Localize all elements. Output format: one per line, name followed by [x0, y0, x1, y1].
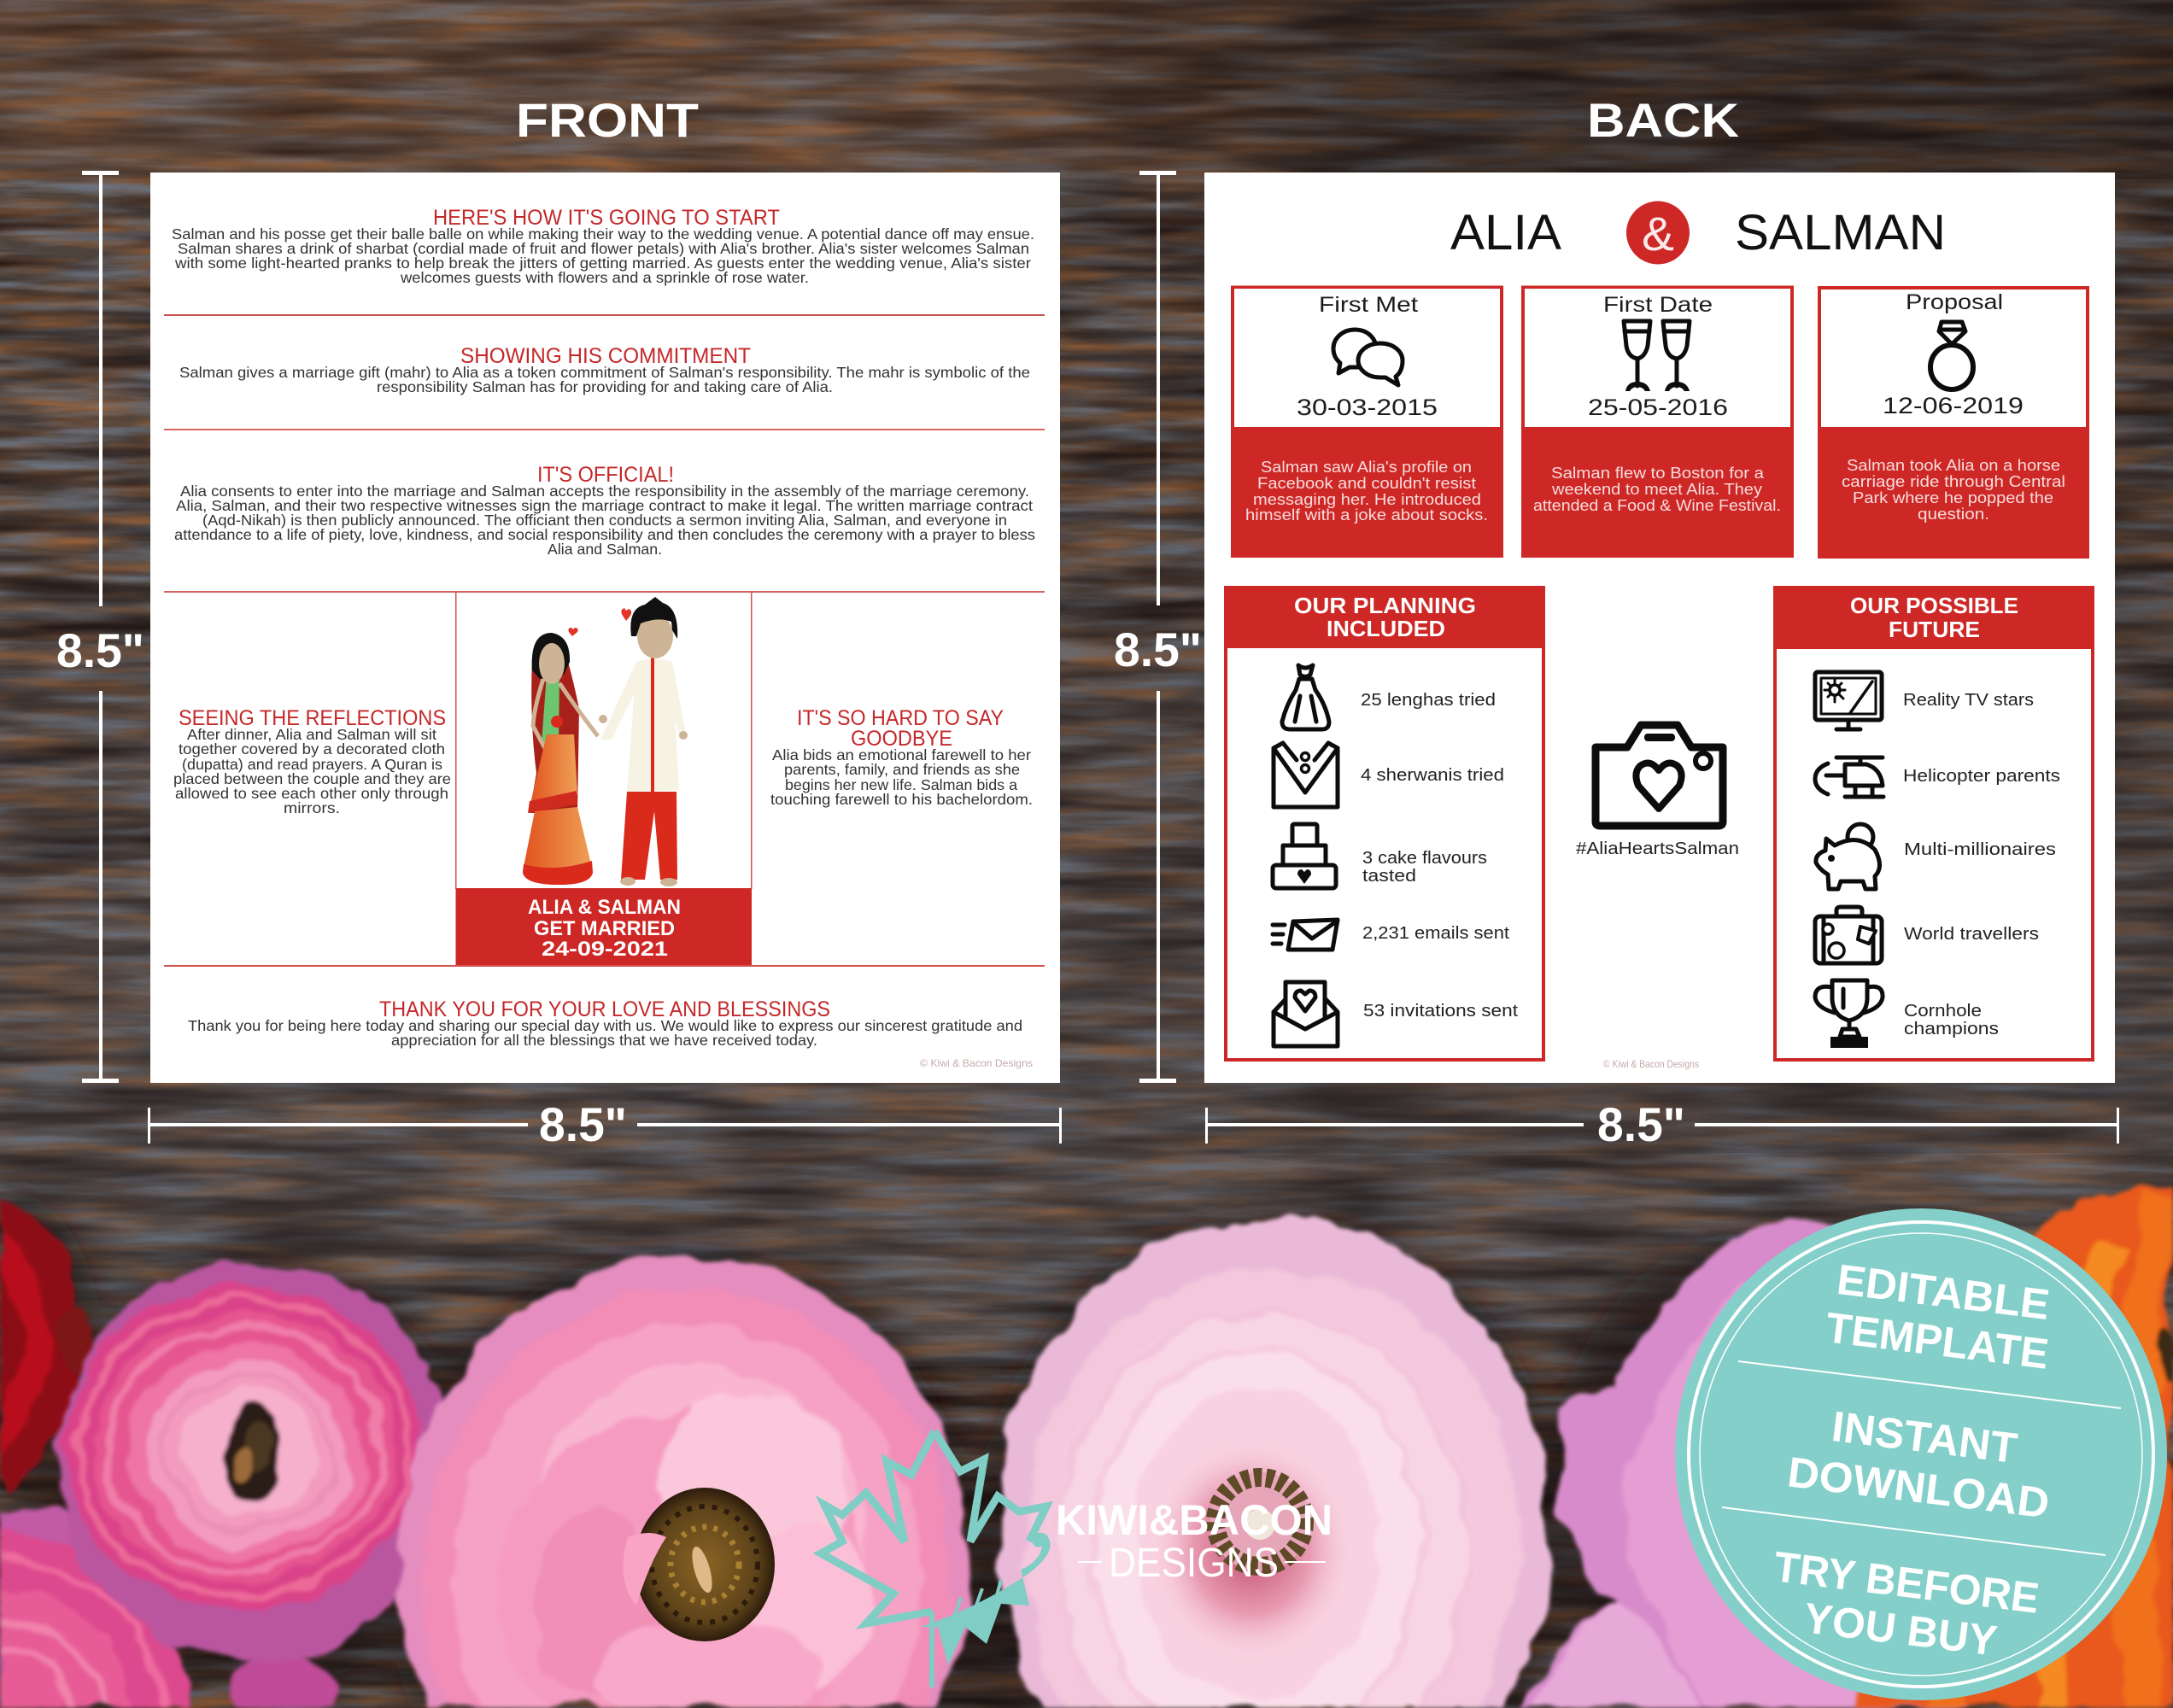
panel: our possible future: Cornhole	[1904, 1002, 1982, 1021]
title: names	[1450, 202, 1946, 265]
section: it's so hard to say goodbye: IT'S SO HARD TO SAY	[797, 706, 1004, 730]
panel: our planning included: 2,231 emails sent	[1362, 924, 1509, 943]
section: seeing the reflections: After dinner, Alia and Salman will sit	[187, 726, 436, 743]
flower: red, far left	[0, 1196, 99, 1490]
panel: our possible future: OUR POSSIBLE	[1850, 593, 2018, 618]
heading: BACK: BACK	[1587, 93, 1739, 147]
icon: trophy	[1815, 980, 1883, 1048]
icon: chat bubbles	[1333, 330, 1403, 385]
icon: dress	[1282, 665, 1329, 729]
section: here's how it's going to start: with some light-hearted pranks to help break the jitters of getting married. As guests enter the wedding venue, Alia's sister	[174, 254, 1031, 272]
dimension: front height: 8.5"	[56, 623, 144, 677]
icon: cake	[1273, 824, 1336, 888]
dimension: front width: 8.5"	[539, 1097, 627, 1151]
section: thank you	[188, 997, 1022, 1049]
section: seeing the reflections: SEEING THE REFLECTIONS	[179, 706, 446, 730]
flower: pale pink centre	[1145, 1435, 1358, 1665]
flower: big pink ranunculus	[396, 1252, 970, 1708]
panel: our planning included: 25 lenghas tried	[1361, 691, 1496, 710]
section: it's so hard to say goodbye	[770, 706, 1033, 808]
card: proposal: Park where he popped the	[1853, 489, 2053, 506]
section: here's how it's going to start: HERE'S HOW IT'S GOING TO START	[433, 206, 780, 230]
card: first date: Salman flew to Boston for a	[1551, 465, 1765, 482]
icon: helicopter	[1815, 757, 1883, 797]
badge: editable template: INSTANT	[1829, 1402, 2020, 1472]
panel: our planning included: 4 sherwanis tried	[1361, 766, 1504, 785]
section: it's official: Alia consents to enter into the marriage and Salman accepts the responsibility in the assembly of the marriage ceremony.	[180, 483, 1029, 500]
flower: magenta, bottom left	[0, 1504, 329, 1708]
dimension: back height	[1114, 171, 1202, 1083]
panel: our possible future: champions	[1904, 1020, 1999, 1038]
copyright front: © Kiwi & Bacon Designs	[920, 1057, 1033, 1069]
icon: ring	[1930, 322, 1973, 389]
logo: kiwi and bacon designs: DESIGNS	[1109, 1541, 1279, 1586]
flowers photo area	[0, 1183, 2173, 1708]
card: first met: First Met	[1319, 293, 1418, 317]
groom	[599, 597, 688, 886]
icon: suitcase	[1815, 907, 1882, 963]
illustration: bride and groom	[523, 597, 688, 886]
banner: get married: ALIA & SALMAN	[528, 896, 681, 919]
flower shadows	[0, 1187, 1973, 1708]
card: first met: himself with a joke about socks.	[1245, 506, 1488, 524]
badge: editable template	[1675, 1208, 2167, 1700]
card: first met	[1231, 285, 1503, 558]
section: seeing the reflections	[173, 706, 451, 816]
section: showing his commitment: responsibility Salman has for providing for and taking care of Alia.	[377, 378, 833, 395]
badge: editable template: YOU BUY	[1801, 1594, 2000, 1665]
panel: back card	[1204, 173, 2115, 1083]
panel: our planning included: INCLUDED	[1327, 616, 1445, 641]
icon: sherwani	[1274, 743, 1338, 807]
panel: our planning included: 3 cake flavours	[1362, 849, 1487, 868]
card: first met: Salman saw Alia's profile on	[1261, 459, 1472, 476]
section: it's so hard to say goodbye: Alia bids an emotional farewell to her	[772, 746, 1031, 763]
section: seeing the reflections: together covered by a decorated cloth	[179, 740, 445, 757]
section: showing his commitment: SHOWING HIS COMMITMENT	[460, 344, 751, 368]
section: thank you: appreciation for all the blessings that we have received today.	[391, 1032, 817, 1049]
section: showing his commitment	[179, 344, 1030, 395]
card: proposal: Salman took Alia on a horse	[1847, 457, 2060, 474]
bride	[523, 628, 598, 885]
icon: invitation	[1274, 982, 1338, 1046]
section: here's how it's going to start: Salman shares a drink of sharbat (cordial made of fruit and flower petals) with Alia's brother. Alia's sister welcomes Salman	[178, 240, 1029, 257]
dimension: front width	[148, 1097, 1062, 1151]
icon: piggy bank	[1816, 824, 1879, 889]
section: it's official: Alia and Salman.	[548, 541, 662, 558]
icon: email	[1273, 920, 1338, 950]
card: first met: messaging her. He introduced	[1253, 491, 1481, 508]
logo: kiwi and bacon designs: KIWI&BACON	[1056, 1496, 1332, 1544]
card: first date: attended a Food & Wine Festival.	[1533, 497, 1781, 514]
card: proposal: Proposal	[1906, 290, 2003, 314]
hashtag: #AliaHeartsSalman	[1576, 839, 1739, 858]
flower: lilac behind badge	[1520, 1225, 1965, 1708]
panel: our planning included: 53 invitations sent	[1363, 1002, 1518, 1021]
card: first date: weekend to meet Alia. They	[1551, 481, 1762, 498]
section: seeing the reflections: placed between the couple and they are	[173, 770, 451, 787]
banner: get married: 24-09-2021	[542, 938, 668, 961]
panel: our possible future: World travellers	[1904, 925, 2039, 944]
panel: front card	[150, 173, 1060, 1083]
section: it's official: Alia, Salman, and their two respective witnesses sign the marriage contract to make it legal. The written marriage contract	[176, 497, 1033, 514]
section: seeing the reflections: (dupatta) and read prayers. A Quran is	[182, 756, 442, 773]
section: it's so hard to say goodbye: begins her new life. Salman bids a	[785, 776, 1017, 793]
title: names: &	[1642, 207, 1674, 260]
badge: editable template: DOWNLOAD	[1785, 1448, 2052, 1528]
title: names: ALIA	[1450, 205, 1561, 260]
card: proposal: 12-06-2019	[1883, 393, 2024, 418]
section: showing his commitment: Salman gives a marriage gift (mahr) to Alia as a token commitment of Salman's responsibility. The mahr is symbolic of the	[179, 364, 1030, 381]
title: names: SALMAN	[1735, 205, 1946, 260]
card: first date: First Date	[1603, 293, 1713, 317]
dimension: back width: 8.5"	[1597, 1097, 1685, 1151]
card: first date: 25-05-2016	[1588, 395, 1728, 420]
banner: get married: GET MARRIED	[534, 917, 675, 940]
section: it's official	[174, 463, 1035, 558]
card: proposal: carriage ride through Central	[1842, 473, 2065, 490]
flower: big pink centre	[623, 1488, 775, 1641]
panel: our possible future: FUTURE	[1889, 617, 1980, 642]
icon: maple leaf with fern	[821, 1431, 1051, 1688]
section: here's how it's going to start	[172, 206, 1034, 286]
card: first met: Facebook and couldn't resist	[1257, 475, 1476, 492]
banner: get married	[456, 888, 752, 966]
dimension: front height	[56, 171, 144, 1083]
panel: our planning included	[1224, 586, 1545, 1060]
section: thank you: THANK YOU FOR YOUR LOVE AND BLESSINGS	[379, 997, 830, 1021]
flower: pale pink ranunculus	[995, 1217, 1550, 1708]
section: it's so hard to say goodbye: GOODBYE	[851, 727, 952, 751]
section: it's official: attendance to a life of piety, love, kindness, and social responsibility and then concludes the ceremony with a prayer to bless	[174, 526, 1035, 543]
dimension: back height: 8.5"	[1114, 623, 1202, 676]
icon: tv	[1815, 672, 1882, 729]
card: first met: 30-03-2015	[1297, 395, 1438, 420]
panel: our planning included: tasted	[1362, 867, 1416, 886]
icon: champagne flutes	[1624, 321, 1690, 391]
panel: our planning included: OUR PLANNING	[1294, 593, 1476, 618]
logo: kiwi and bacon designs	[821, 1431, 1332, 1688]
copyright back: © Kiwi & Bacon Designs	[1603, 1058, 1699, 1070]
card: proposal	[1818, 286, 2089, 559]
panel: our possible future	[1773, 586, 2094, 1060]
section: thank you: Thank you for being here today and sharing our special day with us. We would like to express our sincerest gratitude and	[188, 1017, 1022, 1034]
card: first date	[1521, 285, 1794, 558]
section: here's how it's going to start: welcomes guests with flowers and a sprinkle of rose water.	[400, 269, 809, 286]
dimension: back width	[1205, 1097, 2119, 1151]
section: here's how it's going to start: Salman and his posse get their balle balle on while making their way to the wedding venue. A potential dance off may ensue.	[172, 225, 1034, 243]
flower: magenta ranunculus	[60, 1262, 453, 1662]
flower: orange	[1845, 1183, 2173, 1708]
section: it's so hard to say goodbye: touching farewell to his bachelordom.	[770, 791, 1033, 808]
section: it's official: (Aqd-Nikah) is then publicly announced. The officiant then conducts a sermon inviting Alia, Salman, and everyone in	[202, 512, 1007, 529]
badge: editable template: TRY BEFORE	[1772, 1542, 2041, 1623]
section: it's official: IT'S OFFICIAL!	[537, 463, 674, 487]
section: seeing the reflections: allowed to see each other only through	[175, 785, 448, 802]
heading: FRONT: FRONT	[516, 93, 699, 147]
panel: our possible future: Helicopter parents	[1903, 767, 2060, 786]
panel: our possible future: Reality TV stars	[1903, 691, 2034, 710]
panel: our possible future: Multi-millionaires	[1904, 840, 2056, 859]
section: it's so hard to say goodbye: parents, family, and friends as she	[784, 761, 1020, 778]
section: seeing the reflections: mirrors.	[284, 799, 340, 816]
badge: editable template: EDITABLE	[1835, 1255, 2052, 1329]
badge: editable template: TEMPLATE	[1824, 1303, 2051, 1378]
icon: camera with heart	[1596, 725, 1723, 826]
card: proposal: question.	[1918, 506, 1989, 523]
